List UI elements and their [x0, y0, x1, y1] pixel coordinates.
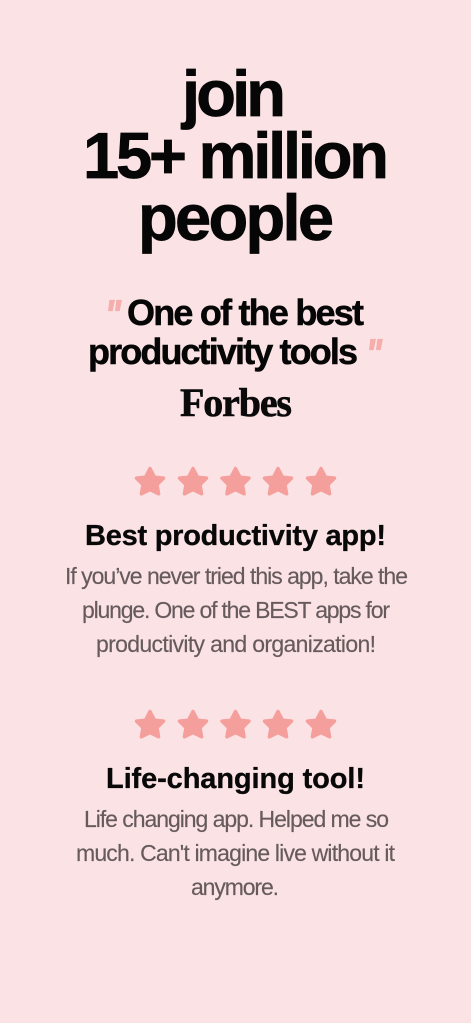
- title: [83, 57, 389, 254]
- review heading: Best productivity app!: [85, 520, 386, 552]
- title: people: [138, 181, 334, 254]
- review text: [65, 563, 408, 657]
- review text: anymore.: [191, 874, 279, 900]
- review text: plunge. One of the BEST apps for: [82, 597, 390, 623]
- stars: [136, 468, 334, 494]
- review text: much. Can't imagine live without it: [76, 840, 396, 866]
- title: join: [180, 57, 286, 130]
- quote text: productivity tools: [88, 331, 358, 372]
- review heading: Life-changing tool!: [106, 763, 365, 795]
- quote text: One of the best: [127, 292, 364, 333]
- closing quote mark: ": [366, 332, 383, 376]
- title: 15+ million: [83, 119, 389, 192]
- review text: [76, 806, 396, 900]
- review text: productivity and organization!: [96, 631, 376, 657]
- press quote: [88, 292, 383, 425]
- Forbes logo: Forbes: [180, 380, 292, 425]
- quote text: [88, 292, 364, 372]
- review text: If you’ve never tried this app, take the: [65, 563, 408, 589]
- review 2: [76, 712, 396, 900]
- stars: [136, 712, 334, 737]
- opening quote mark: ": [105, 293, 122, 337]
- review 1: [65, 468, 408, 657]
- review text: Life changing app. Helped me so: [84, 806, 389, 832]
